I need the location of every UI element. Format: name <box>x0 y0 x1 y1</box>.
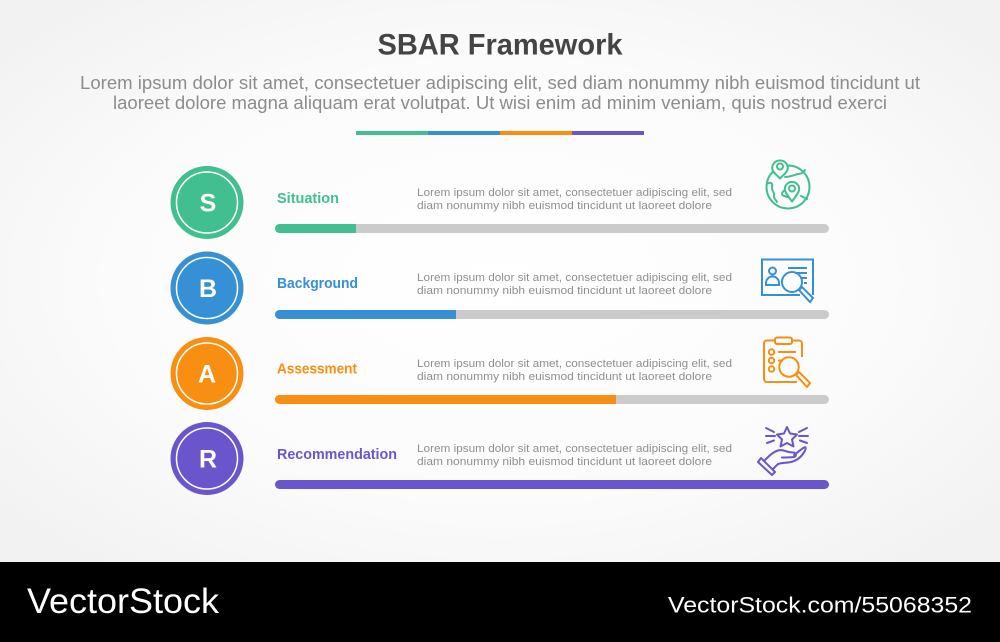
body text background: Lorem ipsum dolor sit amet, consectetuer adipiscing elit, sed <box>417 272 732 284</box>
progress bar background <box>275 310 829 319</box>
body text situation: Lorem ipsum dolor sit amet, consectetuer adipiscing elit, sed <box>417 187 732 199</box>
badge R: R <box>199 446 217 474</box>
progress bar recommendation <box>275 480 829 489</box>
progress bar situation <box>275 224 829 233</box>
label situation: Situation <box>277 191 339 207</box>
description text: laoreet dolore magna aliquam erat volutpat. Ut wisi enim ad minim veniam, quis nostrud exerci <box>113 93 887 113</box>
label assessment: Assessment <box>277 362 357 378</box>
progress bar assessment <box>275 395 829 404</box>
body text background: diam nonummy nibh euismod tincidunt ut laoreet dolore <box>417 285 712 297</box>
icon: profile card with magnifier <box>762 260 813 302</box>
body text assessment: diam nonummy nibh euismod tincidunt ut laoreet dolore <box>417 371 712 383</box>
footer logo text: VectorStock <box>27 582 220 621</box>
badge S: S <box>200 190 216 218</box>
body text background <box>417 272 732 297</box>
icon: globe with pins <box>766 160 810 208</box>
body text assessment: Lorem ipsum dolor sit amet, consectetuer adipiscing elit, sed <box>417 358 732 370</box>
badge B: B <box>199 275 217 303</box>
badge S <box>170 166 244 239</box>
body text assessment <box>417 358 732 383</box>
icon: hand holding star <box>758 427 808 475</box>
footer bar <box>0 562 1000 642</box>
row: situation <box>170 160 829 239</box>
description text: Lorem ipsum dolor sit amet, consectetuer adipiscing elit, sed diam nonummy nibh euismod tincidunt ut <box>80 73 920 93</box>
body text situation <box>417 187 732 212</box>
body text situation: diam nonummy nibh euismod tincidunt ut laoreet dolore <box>417 200 712 212</box>
footer url text: VectorStock.com/55068352 <box>668 592 972 618</box>
row: assessment <box>170 337 829 410</box>
body text recommendation <box>417 443 732 468</box>
badge A <box>170 337 244 410</box>
badge A: A <box>198 360 216 388</box>
title: SBAR Framework <box>378 28 623 62</box>
badge B <box>170 252 244 324</box>
body text recommendation: diam nonummy nibh euismod tincidunt ut laoreet dolore <box>417 456 712 468</box>
body text recommendation: Lorem ipsum dolor sit amet, consectetuer adipiscing elit, sed <box>417 443 732 455</box>
label background: Background <box>277 276 358 292</box>
label recommendation: Recommendation <box>277 447 397 463</box>
description text <box>80 73 920 113</box>
icon: clipboard with magnifier <box>764 338 810 387</box>
row: background <box>170 252 829 324</box>
title underline <box>356 131 644 135</box>
row: recommendation <box>170 422 829 495</box>
badge R <box>170 422 244 495</box>
